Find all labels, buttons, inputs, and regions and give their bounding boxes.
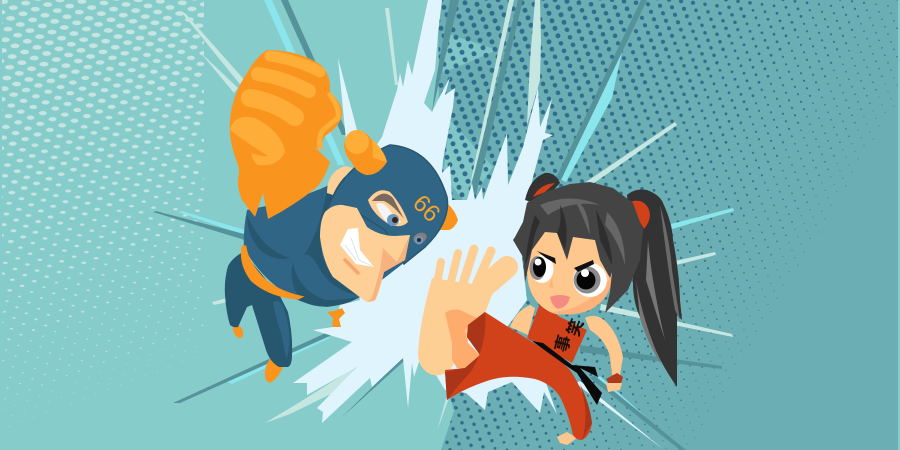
girl: chin shadow: [550, 275, 612, 315]
hero: torso shadows: [247, 170, 360, 307]
hero: nose shadow: [367, 235, 410, 302]
background: darker teal right half: [438, 0, 898, 450]
girl: sole: [418, 278, 500, 375]
girl: trouser leg shade: [580, 384, 592, 440]
speed lines: pale: [182, 0, 733, 431]
speed line: white lower right: [575, 381, 663, 449]
background: light wedges inside dark half: [443, 32, 497, 205]
girl: gi top: [527, 303, 587, 363]
hero: small hand: [327, 308, 345, 327]
girl: trouser dark fold: [445, 312, 485, 400]
character: kung fu girl: [418, 173, 682, 445]
girl: black belt: [532, 341, 602, 405]
girl: right eye: [573, 263, 607, 297]
hero: legs: [225, 252, 292, 367]
impact burst: [293, 0, 557, 423]
hero: thumb highlight: [230, 117, 285, 165]
girl: near arm: [585, 316, 623, 375]
hero: raised arm and fist: [230, 50, 342, 219]
girl: mouth: [550, 295, 570, 309]
halftone: right dark dots: [438, 0, 898, 450]
girl: red hair tie right: [628, 201, 650, 229]
girl: raised foot: [418, 249, 507, 375]
hero: teeth: [340, 228, 374, 267]
hero: far eye: [412, 231, 428, 245]
girl: ponytail: [627, 190, 682, 387]
girl: far arm: [510, 305, 535, 335]
hero: knuckle highlights: [250, 56, 338, 147]
girl: hair front: [513, 182, 643, 313]
speed lines: dark: [153, 0, 722, 450]
hero: head crest: [344, 130, 387, 175]
halftone: left pale dots: [2, 0, 204, 430]
girl: fist: [606, 383, 622, 392]
girl: nose: [549, 277, 553, 288]
girl: hair lowlights: [525, 205, 612, 265]
hero: back fin: [435, 203, 458, 230]
girl: lower bare foot: [557, 432, 577, 445]
girl: trousers: [445, 312, 592, 440]
girl: red hair tie left: [533, 183, 555, 197]
hero: small foot: [231, 322, 245, 340]
girl: wristband: [606, 373, 623, 384]
girl: eyebrows: [537, 251, 594, 272]
girl: ankle shade: [445, 309, 480, 370]
hero: ear: [327, 166, 353, 195]
hero: forehead emblem: 66: [407, 190, 445, 228]
hero: face: [320, 205, 410, 302]
hero: teeth shading: [345, 238, 372, 266]
hero: near eye: [368, 190, 408, 226]
impact spike upper left: [338, 58, 357, 140]
hero: torso: [244, 160, 405, 307]
girl: toes: [436, 249, 507, 292]
hero: belt: [242, 247, 300, 298]
girl: hair bun: [525, 173, 560, 205]
girl: hair highlights: [540, 198, 625, 265]
girl: face: [527, 225, 612, 314]
speed lines: cyan: [178, 0, 734, 428]
girl: gi characters: [552, 316, 587, 354]
hero: mask: [322, 145, 448, 264]
hero: cheek line: [345, 260, 358, 273]
girl: left eye: [530, 255, 554, 283]
hero: leg highlight: [273, 301, 289, 358]
girl: gi characters: 笑: [564, 316, 587, 339]
girl: gi characters: 事: [552, 333, 575, 354]
character: masked superhero: [225, 50, 458, 383]
hero: large foot: [265, 356, 283, 383]
